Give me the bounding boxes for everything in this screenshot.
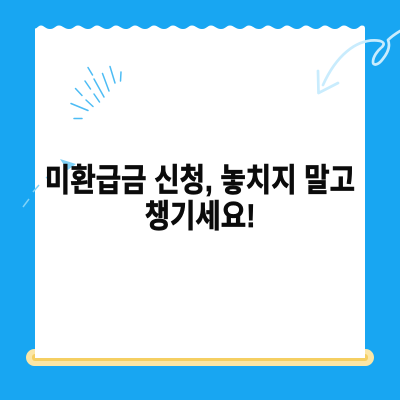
- bottom yellow bar: [26, 349, 374, 366]
- white card with scalloped top: [35, 26, 365, 358]
- icon: sparkle lines: [71, 66, 121, 118]
- title line 2: 챙기세요!: [145, 198, 255, 234]
- arrow: curly arrow top right: [318, 31, 400, 93]
- title line 1: 미환급금 신청, 놓치지 말고: [45, 162, 355, 198]
- arrow: paper plane trail left: [23, 159, 76, 207]
